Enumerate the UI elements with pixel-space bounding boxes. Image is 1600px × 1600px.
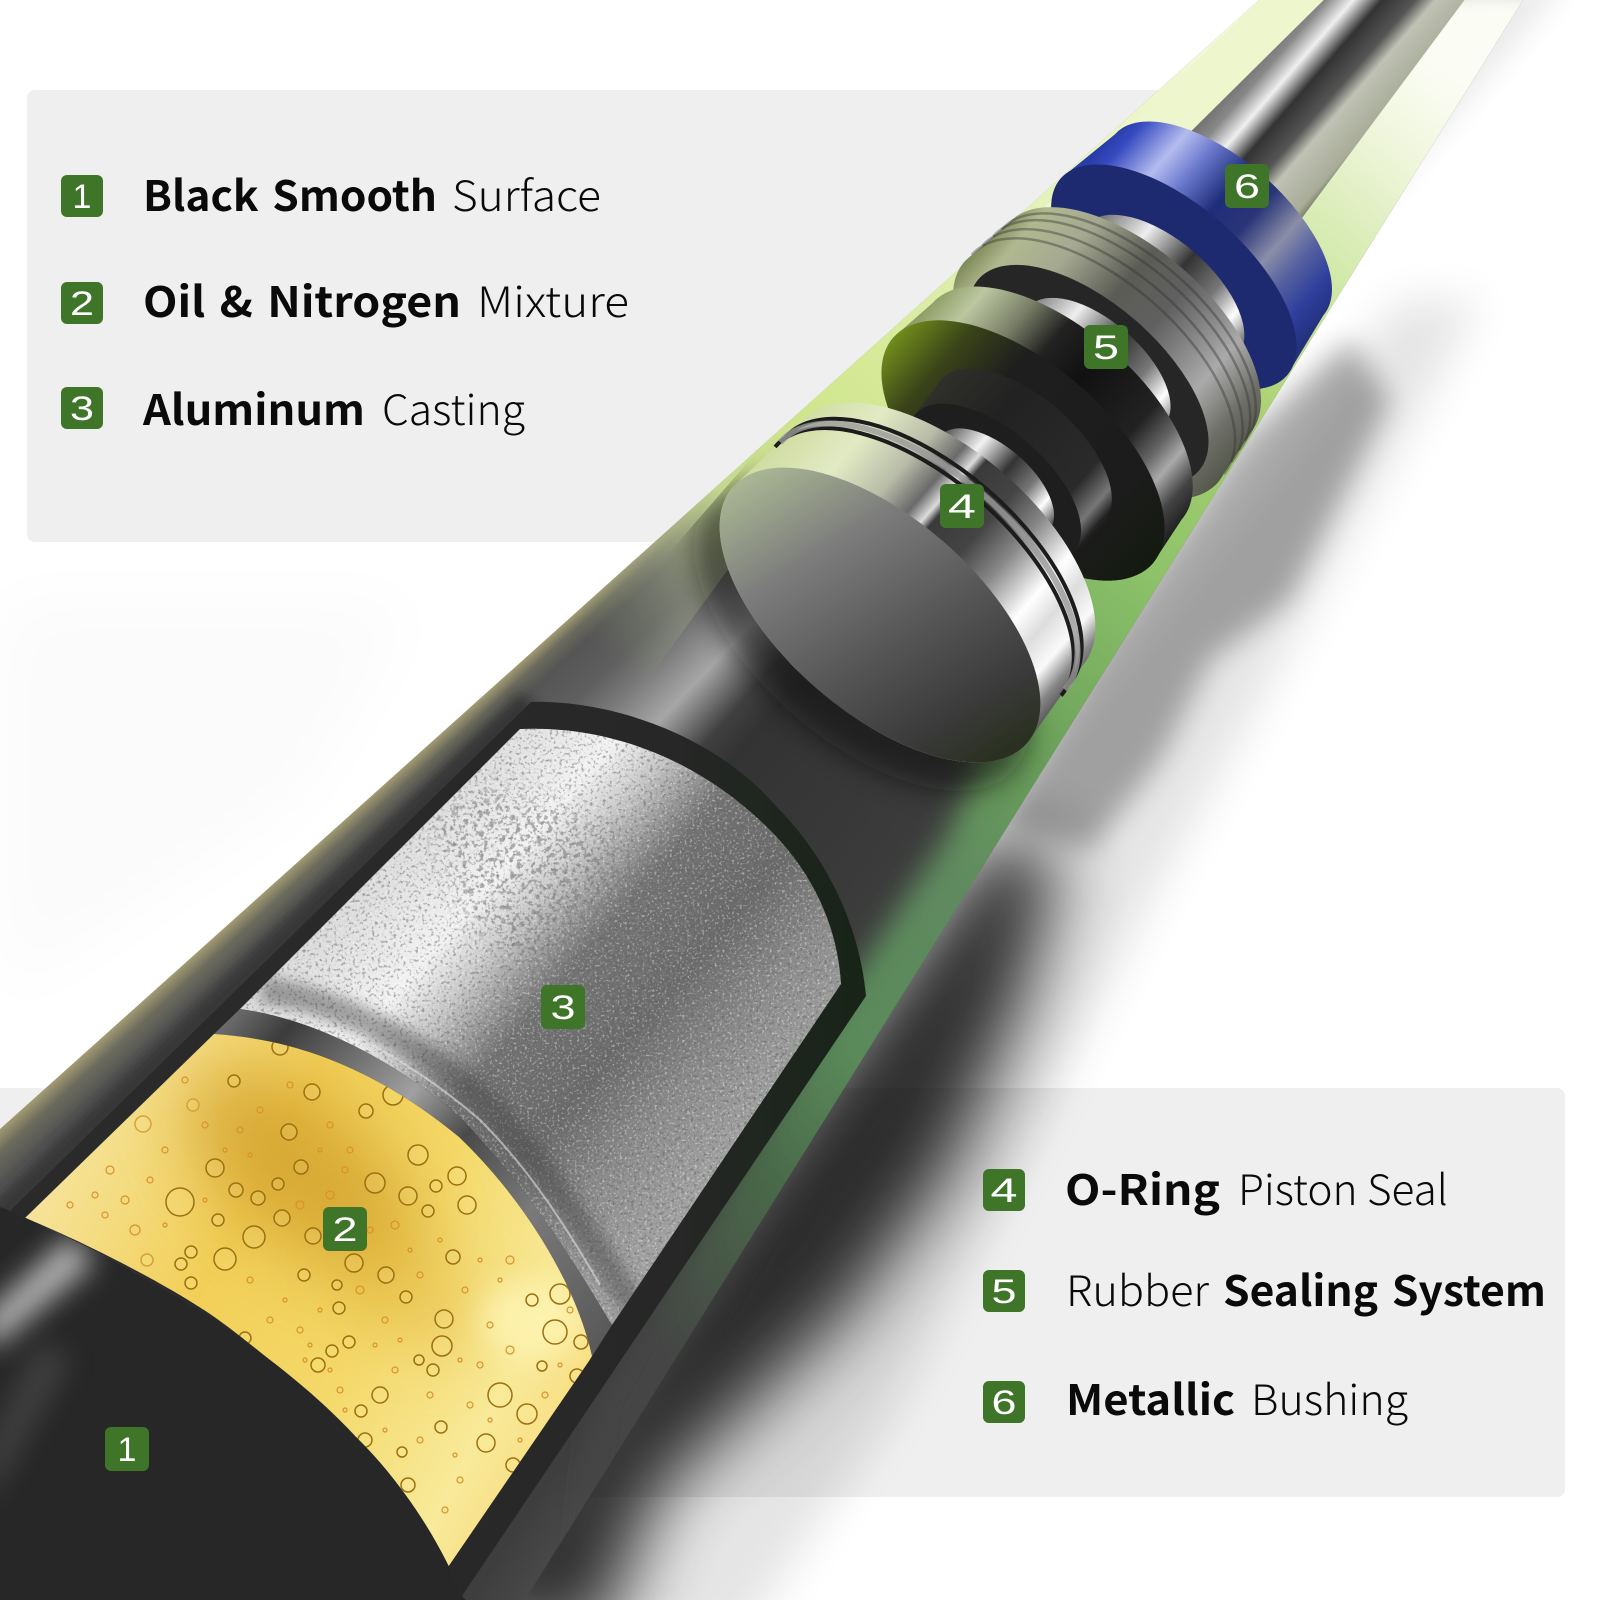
badge 5 on diagram: 5 [1093,329,1119,367]
legend: bottom right list [983,1157,1546,1428]
legend item 6: Bushing [1251,1367,1408,1428]
metallic bushing, blue [1013,77,1376,430]
legend item 3: Casting [382,377,525,438]
legend item 4: Piston Seal [1238,1157,1448,1218]
spindle in front of the bushing [1021,187,1270,432]
sealing disc hub [879,339,1140,593]
piston face [669,414,1091,816]
legend item 1: Surface [452,163,601,224]
badge 6 on diagram [1225,164,1269,208]
badge 4 on diagram: 4 [948,488,976,526]
layer: black smooth outer surface [0,1190,485,1600]
layer: metal collar between aluminum and oil [214,1009,612,1361]
spindle behind the bushing [1016,167,1289,436]
threaded seal ring [909,158,1309,546]
legend item 2: Oil & Nitrogen [143,269,461,330]
legend item 3: 3 [70,390,94,428]
cutaway window: dark rim [10,702,866,1596]
legend item 3: Aluminum [142,377,365,438]
legend item 5: Rubber [1066,1258,1210,1319]
spindle between seals [954,270,1198,510]
piston and rod assembly [669,0,1600,816]
legend item 2 [61,269,629,330]
panel: top-left legend background [27,90,1260,542]
legend item 4: O-Ring [1065,1157,1220,1218]
legend item 1 [61,163,601,224]
small bubbles [67,1077,573,1513]
legend item 4 [983,1157,1448,1218]
legend item 6 [983,1367,1408,1428]
piston rod [1120,0,1553,304]
large bubbles [135,1039,588,1492]
badge 5 on diagram [1084,325,1128,369]
legend: top left list [61,163,629,438]
legend item 5: Sealing System [1223,1258,1546,1319]
badge 2 on diagram [323,1207,367,1251]
soft shadow of the piston on the tube [678,463,1046,806]
legend item 3 [61,377,525,438]
legend item 1: 1 [73,178,91,216]
legend item 5: 5 [992,1273,1016,1311]
badge 1 on diagram [105,1427,149,1471]
badge 3 on diagram: 3 [550,989,576,1027]
rubber sealing disc, black [837,237,1241,628]
layer: aluminum casting [240,728,841,1325]
badge 6 on diagram: 6 [1234,168,1260,206]
legend item 4: 4 [990,1172,1018,1210]
legend item 5 [983,1258,1546,1319]
piston neck [864,409,1073,618]
legend item 6: 6 [992,1384,1016,1422]
badge 4 on diagram [940,484,984,528]
legend item 1: Black Smooth [143,163,437,224]
piston head with O-ring groove [669,345,1151,816]
panel: bottom-right legend background [0,1088,1565,1497]
legend item 2: Mixture [477,269,629,330]
badge 3 on diagram [541,985,585,1029]
badge 1 on diagram: 1 [118,1431,136,1469]
legend item 2: 2 [70,285,94,323]
legend item 6: Metallic [1066,1367,1235,1428]
layer: oil and nitrogen mixture with bubbles [25,1034,592,1566]
badge 2 on diagram: 2 [332,1211,358,1249]
